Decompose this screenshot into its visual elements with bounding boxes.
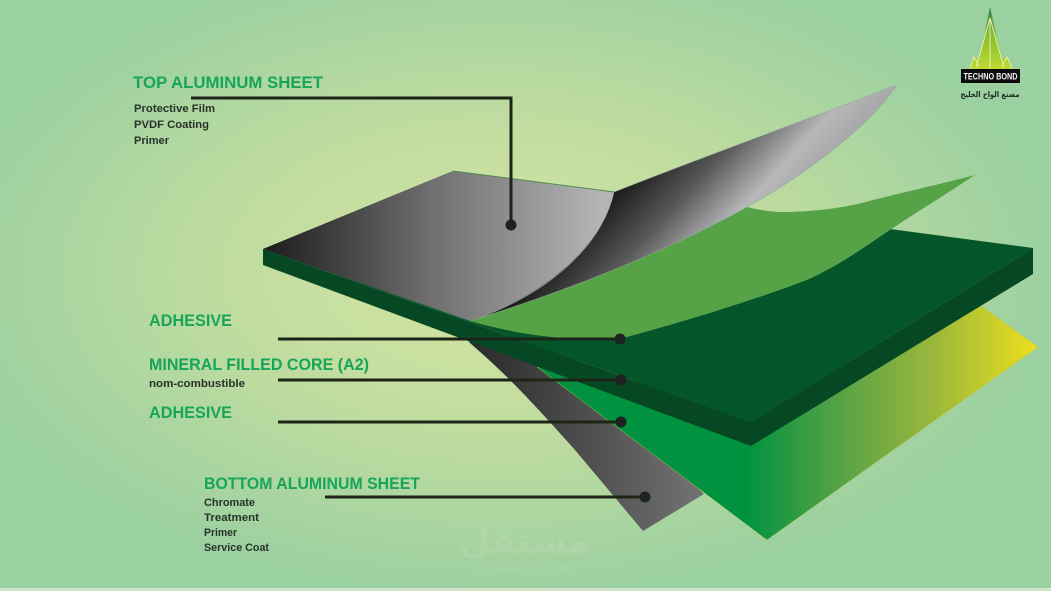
logo: Techno Bond: مصنع الواح الخليج (960, 90, 1020, 99)
label: adhesive lower: ADHESIVE (149, 404, 232, 422)
label: bottom aluminum sheet: Service Coat (204, 542, 269, 554)
watermark: مستقل (459, 521, 591, 562)
layer: bottom aluminum sheet (462, 332, 704, 531)
logo: Techno Bond: TECHNO BOND (964, 72, 1018, 82)
logo: Techno Bond (960, 7, 1020, 99)
label: mineral filled core: nom-combustible (149, 378, 245, 390)
label: mineral filled core: MINERAL FILLED CORE (A2) (149, 356, 369, 374)
label: bottom aluminum sheet: Chromate (204, 497, 255, 509)
layer: top aluminum curled sheet (470, 85, 897, 321)
logo wordmark (961, 69, 1020, 83)
layer: lower adhesive sheet (537, 305, 1038, 540)
label: mineral filled core (149, 356, 369, 390)
label: top aluminum sheet: Primer (134, 135, 170, 147)
core top face (263, 171, 1033, 422)
label: top aluminum sheet (133, 74, 323, 147)
label: bottom aluminum sheet: Treatment (204, 512, 259, 524)
leader: mineral filled core (278, 374, 626, 386)
label: top aluminum sheet: PVDF Coating (134, 119, 209, 131)
leader: adhesive upper (278, 334, 626, 344)
label: bottom aluminum sheet: Primer (204, 527, 238, 539)
label: top aluminum sheet: Protective Film (134, 103, 215, 115)
label: adhesive upper: ADHESIVE (149, 312, 232, 330)
layer: top aluminum flat sheet (263, 171, 614, 321)
core side face (263, 248, 1033, 446)
label: top aluminum sheet: TOP ALUMINUM SHEET (133, 74, 323, 92)
layer: upper adhesive sheet (470, 175, 975, 339)
label: bottom aluminum sheet: BOTTOM ALUMINUM SHEET (204, 475, 420, 493)
leader: top aluminum sheet (191, 98, 516, 230)
leader: adhesive lower (278, 416, 626, 428)
layer: mineral filled core (263, 171, 1033, 446)
watermark: mostaql.com (477, 560, 573, 577)
label: bottom aluminum sheet (204, 475, 420, 554)
leader: bottom aluminum sheet (325, 492, 650, 502)
icon: spire (969, 7, 1013, 69)
